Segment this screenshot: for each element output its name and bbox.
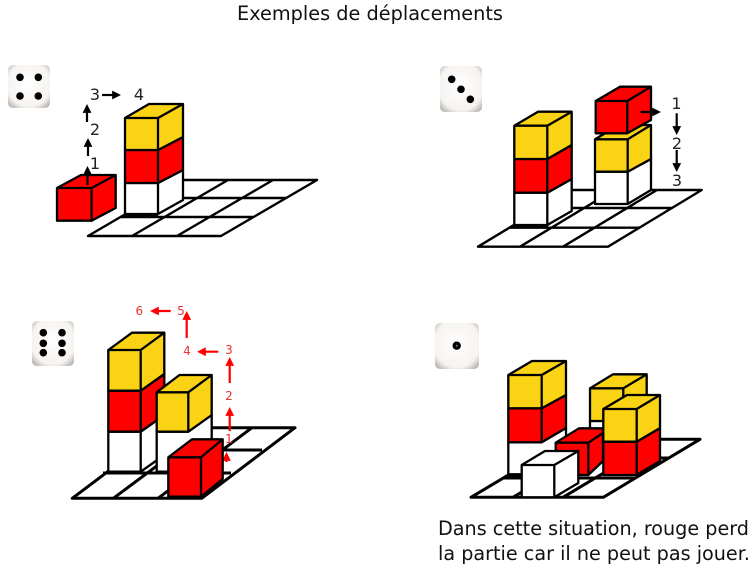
panel: example with die 3 bbox=[440, 66, 702, 247]
red moving piece bbox=[596, 87, 651, 133]
panel: example with die 6 bbox=[32, 304, 295, 498]
arrows and step numbers bbox=[87, 85, 144, 185]
red arrows and step numbers: 4 bbox=[183, 344, 191, 358]
red piece bbox=[556, 428, 603, 475]
icon: die showing three bbox=[440, 66, 482, 112]
red arrows and step numbers: 3 bbox=[225, 343, 233, 357]
left tower bbox=[513, 112, 572, 226]
arrows and step numbers: 3 bbox=[90, 85, 100, 104]
icon: die showing six bbox=[32, 321, 74, 366]
arrows and step numbers: 4 bbox=[134, 85, 144, 104]
arrows and step numbers bbox=[641, 94, 682, 190]
red arrows and step numbers: 1 bbox=[225, 432, 233, 446]
title: Exemples de déplacements bbox=[237, 2, 503, 25]
icon: die showing one bbox=[435, 323, 479, 369]
white moving piece bbox=[522, 451, 578, 497]
caption: Dans cette situation, rouge perd bbox=[438, 517, 749, 540]
red arrows and step numbers: 6 bbox=[135, 304, 143, 318]
panel: example with die 4 bbox=[8, 65, 317, 236]
game board grid bbox=[72, 428, 295, 498]
arrows and step numbers: 1 bbox=[90, 154, 100, 173]
game board grid bbox=[471, 439, 700, 497]
icon: die showing four bbox=[8, 65, 50, 108]
arrows and step numbers: 2 bbox=[672, 134, 682, 153]
caption: la partie car il ne peut pas jouer. bbox=[438, 542, 750, 565]
red moving piece bbox=[57, 175, 116, 221]
red arrows and step numbers: 2 bbox=[225, 389, 233, 403]
arrows and step numbers: 2 bbox=[90, 120, 100, 139]
middle tower bbox=[157, 375, 212, 472]
game board grid bbox=[478, 190, 702, 247]
red moving piece bbox=[168, 439, 223, 497]
tall left tower bbox=[107, 333, 164, 473]
back tower bbox=[590, 374, 647, 455]
arrows and step numbers: 3 bbox=[672, 171, 682, 190]
game board grid bbox=[88, 180, 317, 236]
red arrows and step numbers: 5 bbox=[177, 304, 185, 318]
tower: white red yellow bbox=[124, 104, 183, 215]
panel: example with die 1 bbox=[435, 323, 750, 565]
red arrows and step numbers bbox=[135, 304, 233, 462]
arrows and step numbers: 1 bbox=[671, 94, 682, 113]
right tower bbox=[595, 125, 651, 204]
tall left tower bbox=[507, 361, 566, 476]
caption bbox=[438, 517, 750, 565]
front tower red yellow bbox=[603, 395, 660, 475]
